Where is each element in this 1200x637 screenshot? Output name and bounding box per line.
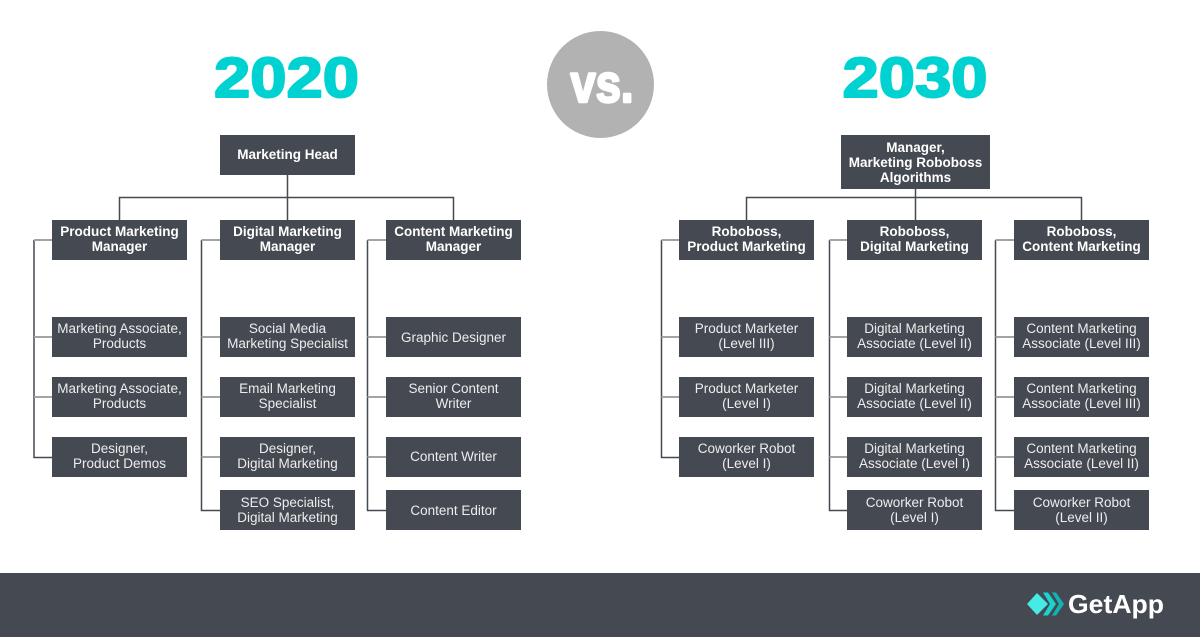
box: Marketing Associate, Products 1: Products: [93, 336, 146, 351]
box: Digital Marketing Associate (Level II) 1: Digital Marketing: [864, 321, 965, 336]
box: Coworker Robot (Level I): (Level I): [722, 456, 771, 471]
box: Designer, Digital Marketing: Digital Marketing: [237, 456, 338, 471]
box: Digital Marketing Associate (Level I): Associate (Level I): [859, 456, 970, 471]
box: Manager, Marketing Roboboss Algorithms: Algorithms: [880, 170, 951, 185]
box: Coworker Robot (Level I): [679, 437, 814, 477]
box: Email Marketing Specialist: Specialist: [259, 396, 317, 411]
box: Product Marketer (Level III): [679, 317, 814, 357]
box: Product Marketer (Level I): Product Marketer: [695, 381, 799, 396]
box: Manager, Marketing Roboboss Algorithms: Marketing Roboboss: [849, 155, 982, 170]
box: Roboboss, Product Marketing: Product Marketing: [687, 239, 806, 254]
box: Product Marketer (Level III): (Level III): [718, 336, 775, 351]
box: Digital Marketing Associate (Level I): [847, 437, 982, 477]
logo: GetApp: GetApp: [1068, 589, 1164, 619]
badge: vs.: vs.: [570, 54, 634, 114]
box: Coworker Robot (Level I) digital: Coworker Robot: [866, 495, 964, 510]
box: Coworker Robot (Level II): [1014, 490, 1149, 530]
box: Social Media Marketing Specialist: [220, 317, 355, 357]
box: Digital Marketing Manager: [220, 220, 355, 260]
box: Senior Content Writer: [386, 377, 521, 417]
box: Graphic Designer: [386, 317, 521, 357]
box: Marketing Associate, Products 2: [52, 377, 187, 417]
box: Product Marketing Manager: Manager: [92, 239, 148, 254]
box: Digital Marketing Associate (Level I): Digital Marketing: [864, 441, 965, 456]
box: Designer, Digital Marketing: Designer,: [259, 441, 316, 456]
box: Content Marketing Manager: [386, 220, 521, 260]
box: Content Marketing Associate (Level II): [1014, 437, 1149, 477]
box: Digital Marketing Associate (Level II) 1: [847, 317, 982, 357]
box: Digital Marketing Associate (Level II) 2: Associate (Level II): [857, 396, 972, 411]
box: Senior Content Writer: Writer: [436, 396, 472, 411]
box: Roboboss, Digital Marketing: Roboboss,: [880, 224, 949, 239]
box: Marketing Associate, Products 1: [52, 317, 187, 357]
box: Email Marketing Specialist: [220, 377, 355, 417]
box: Coworker Robot (Level I): Coworker Robot: [698, 441, 796, 456]
box: Designer, Product Demos: [52, 437, 187, 477]
box: Manager, Marketing Roboboss Algorithms: Manager,: [886, 140, 945, 155]
heading: 2020: 2020: [214, 46, 359, 110]
box: Content Marketing Associate (Level III) 1: [1014, 317, 1149, 357]
box: Roboboss, Product Marketing: Roboboss,: [712, 224, 781, 239]
box: Coworker Robot (Level II): (Level II): [1055, 510, 1108, 525]
box: Content Writer: [386, 437, 521, 477]
box: Designer, Product Demos: Designer,: [91, 441, 148, 456]
box: Digital Marketing Manager: Digital Marketing: [233, 224, 342, 239]
connectors: 2030 chart: [662, 189, 1082, 510]
heading: 2030: 2030: [842, 46, 988, 110]
box: Roboboss, Product Marketing: [679, 220, 814, 260]
box: SEO Specialist, Digital Marketing: SEO Specialist,: [241, 495, 334, 510]
box: SEO Specialist, Digital Marketing: Digital Marketing: [237, 510, 338, 525]
box: Roboboss, Content Marketing: Roboboss,: [1047, 224, 1116, 239]
box: Coworker Robot (Level I) digital: (Level I): [890, 510, 939, 525]
box: Social Media Marketing Specialist: Social Media: [249, 321, 327, 336]
box: Content Marketing Associate (Level II): Associate (Level II): [1024, 456, 1139, 471]
box: Content Marketing Manager: Content Marketing: [394, 224, 513, 239]
box: SEO Specialist, Digital Marketing: [220, 490, 355, 530]
box: Product Marketing Manager: [52, 220, 187, 260]
box: Marketing Associate, Products 1: Marketing Associate,: [57, 321, 182, 336]
box: Product Marketer (Level I): [679, 377, 814, 417]
box: Social Media Marketing Specialist: Marketing Specialist: [227, 336, 348, 351]
box: Senior Content Writer: Senior Content: [408, 381, 499, 396]
box: Roboboss, Digital Marketing: Digital Marketing: [860, 239, 969, 254]
box: Roboboss, Digital Marketing: [847, 220, 982, 260]
box: Content Writer: Content Writer: [410, 449, 497, 464]
box: Content Marketing Associate (Level II): Content Marketing: [1026, 441, 1137, 456]
box: Marketing Head: Marketing Head: [237, 147, 338, 162]
box: Marketing Head: [220, 135, 355, 175]
box: Content Marketing Associate (Level III) 2: Content Marketing: [1026, 381, 1137, 396]
box: Digital Marketing Associate (Level II) 2: Digital Marketing: [864, 381, 965, 396]
box: Designer, Digital Marketing: [220, 437, 355, 477]
box: Content Marketing Associate (Level III) 1: Associate (Level III): [1022, 336, 1141, 351]
box: Product Marketing Manager: Product Marketing: [60, 224, 179, 239]
box: Product Marketer (Level III): Product Marketer: [695, 321, 799, 336]
box: Digital Marketing Associate (Level II) 1: Associate (Level II): [857, 336, 972, 351]
box: Content Editor: Content Editor: [410, 503, 497, 518]
box: Email Marketing Specialist: Email Marketing: [239, 381, 336, 396]
box: Content Editor: [386, 490, 521, 530]
box: Content Marketing Manager: Manager: [426, 239, 482, 254]
box: Content Marketing Associate (Level III) 2: Associate (Level III): [1022, 396, 1141, 411]
box: Roboboss, Content Marketing: Content Marketing: [1022, 239, 1141, 254]
logo: GetApp: [1027, 589, 1164, 619]
box: Designer, Product Demos: Product Demos: [73, 456, 166, 471]
box: Marketing Associate, Products 2: Marketing Associate,: [57, 381, 182, 396]
box: Marketing Associate, Products 2: Products: [93, 396, 146, 411]
box: Coworker Robot (Level II): Coworker Robot: [1033, 495, 1131, 510]
box: Roboboss, Content Marketing: [1014, 220, 1149, 260]
footer band: [0, 573, 1200, 637]
box: Digital Marketing Associate (Level II) 2: [847, 377, 982, 417]
box: Product Marketer (Level I): (Level I): [722, 396, 771, 411]
connectors: 2020 chart: [34, 175, 454, 510]
box: Manager, Marketing Roboboss Algorithms: [841, 135, 990, 189]
badge: vs.: [547, 31, 654, 138]
box: Graphic Designer: Graphic Designer: [401, 330, 507, 345]
box: Content Marketing Associate (Level III) 1: Content Marketing: [1026, 321, 1137, 336]
box: Coworker Robot (Level I) digital: [847, 490, 982, 530]
box: Content Marketing Associate (Level III) 2: [1014, 377, 1149, 417]
box: Digital Marketing Manager: Manager: [260, 239, 316, 254]
